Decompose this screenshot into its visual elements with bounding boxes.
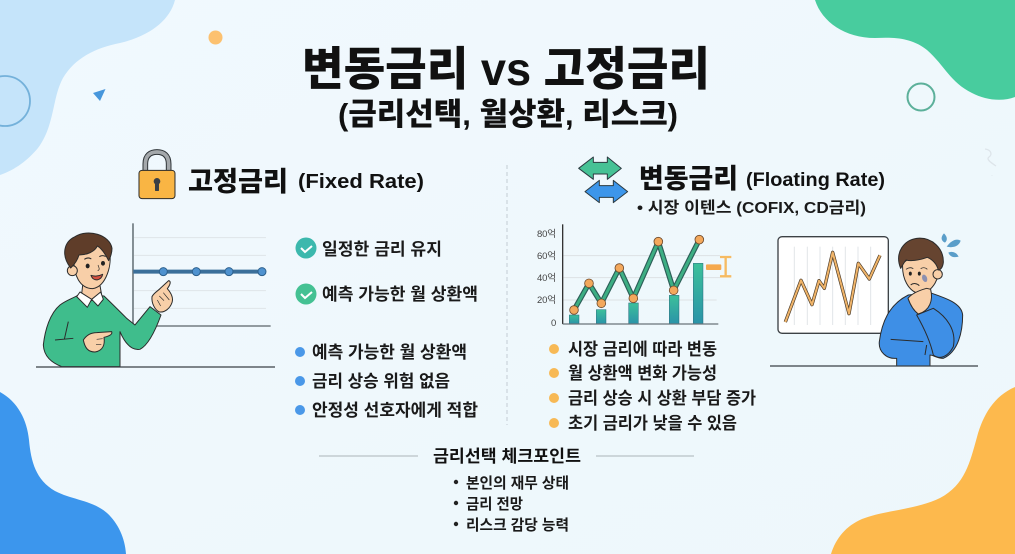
list: checks: 일정한 금리 유지 [322,240,442,259]
chart: fixed rate line [133,223,271,326]
list: checks [296,238,478,304]
blob: top left [0,0,175,175]
divider [506,165,508,425]
chart: floating rate: 40억 [537,272,556,284]
decoration: orange dot [208,30,222,44]
chart: floating rate: 0 [551,318,556,329]
checkpoint list: 금리 전망 [466,496,523,513]
illustration: volatile chart card [778,237,888,333]
decoration: faint question mark [985,149,996,176]
list: floating rate features: 금리 상승 시 상환 부담 증가 [568,389,756,408]
title: 변동금리 vs 고정금리 [302,43,710,95]
checkpoint heading: 금리선택 체크포인트 [433,447,581,466]
decoration: green ring [908,84,934,110]
icon: padlock [139,152,175,199]
illustration: worried man [879,233,963,366]
list: fixed rate features: 금리 상승 위험 없음 [312,372,450,391]
heading: floating rate: 변동금리 [639,164,738,194]
ground line right [770,365,978,367]
list: floating rate features: 시장 금리에 따라 변동 [568,340,717,359]
icon: two-way arrows [579,157,628,203]
heading: fixed rate [188,167,424,197]
blob: top right [815,0,1015,100]
check 1 [296,238,316,258]
chart: floating rate [537,224,731,329]
list: floating rate features: 초기 금리가 낮을 수 있음 [568,414,737,433]
subtitle: (금리선택, 월상환, 리스크) [338,97,678,132]
subheading: market index: • 시장 이텐스 (COFIX, CD금리) [637,199,866,217]
heading: fixed rate: (Fixed Rate) [298,171,424,193]
list: fixed rate features [295,343,478,420]
decoration: ring left [0,76,30,126]
list: fixed rate features: 안정성 선호자에게 적합 [312,401,478,420]
chart: floating rate: 20억 [537,294,556,306]
list: checks: 예측 가능한 월 상환액 [322,285,478,304]
blob: bottom left [0,392,126,554]
chart: floating rate: 60억 [537,250,556,262]
checkpoint list: 리스크 감당 능력 [466,517,569,534]
ground line left [36,366,275,368]
heading: floating rate [639,164,885,194]
list: fixed rate features: 예측 가능한 월 상환액 [312,343,467,362]
check 2 [296,284,316,304]
list: floating rate features: 월 상환액 변화 가능성 [568,364,717,383]
decoration: blue triangle [93,89,106,101]
heading: floating rate: (Floating Rate) [746,170,885,191]
checkpoint list: 본인의 재무 상태 [466,475,569,492]
chart: floating rate: 80억 [537,228,556,240]
blob: bottom right [831,387,1015,554]
illustration: man pointing [43,233,173,367]
list: floating rate features [549,340,756,433]
checkpoint list [454,475,569,534]
heading: fixed rate: 고정금리 [188,167,288,197]
